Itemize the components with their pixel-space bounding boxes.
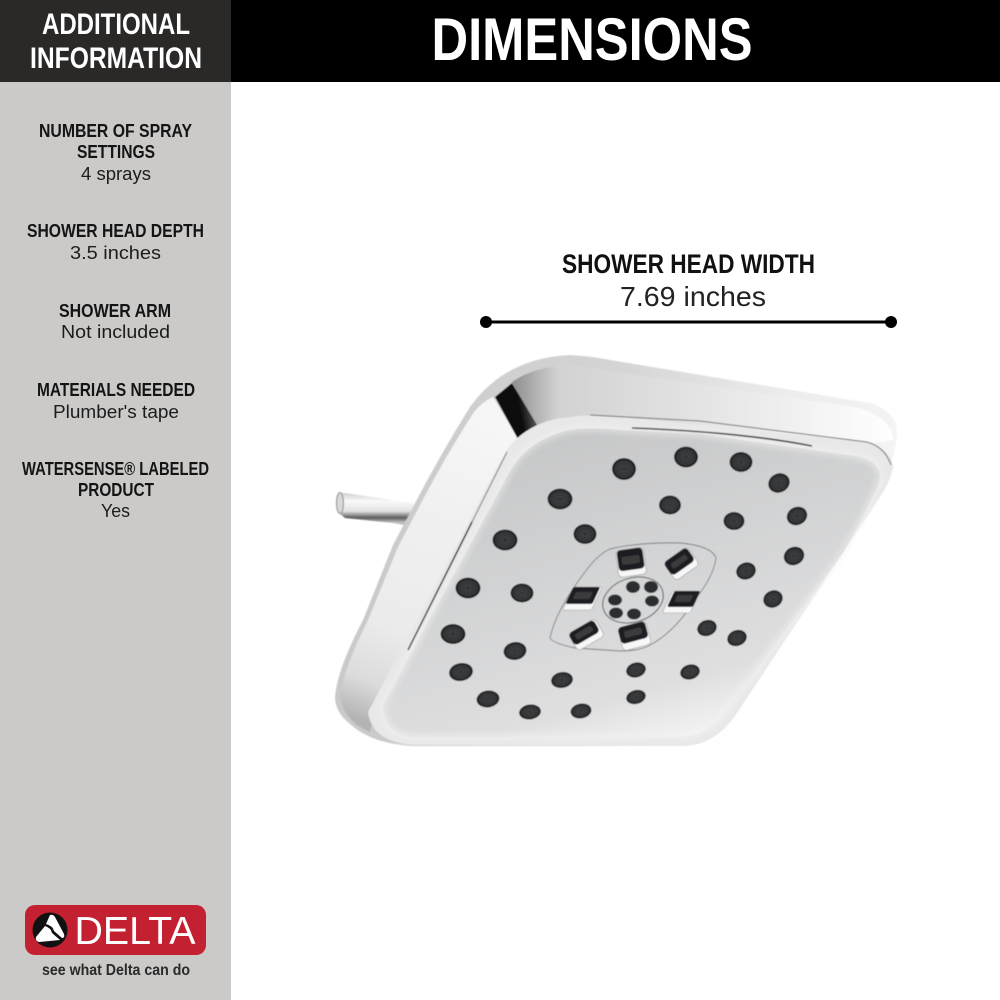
logo: delta: DELTA — [74, 910, 196, 953]
text block: watersense labeled product: WATERSENSE® LABELED — [22, 458, 209, 479]
spray face — [383, 428, 880, 737]
jet right — [662, 591, 700, 613]
text block: watersense labeled product — [22, 458, 209, 521]
text block: watersense labeled product: PRODUCT — [78, 479, 155, 500]
chrome reflection streak — [495, 383, 537, 441]
text block: materials needed: Plumber's tape — [53, 401, 179, 422]
inner nozzle ring — [597, 569, 669, 631]
text block: shower arm — [59, 300, 171, 342]
shower arm stub — [336, 492, 414, 526]
text block: number of spray settings — [39, 120, 193, 184]
heading: additional information: INFORMATION — [30, 42, 202, 75]
outer spray nozzles — [441, 447, 810, 720]
jet bottom-left — [568, 618, 605, 651]
jet bottom-right — [617, 621, 652, 651]
text block: number of spray settings: NUMBER OF SPRAY — [39, 120, 193, 141]
logo: delta: see what Delta can do — [42, 962, 190, 979]
jet top-right — [663, 546, 700, 581]
heading: additional information: ADDITIONAL — [42, 8, 190, 41]
front rim — [368, 415, 893, 746]
text block: watersense labeled product: Yes — [101, 500, 130, 521]
rectangular jets — [563, 546, 700, 651]
text block: shower head depth: SHOWER HEAD DEPTH — [27, 220, 204, 241]
text block: number of spray settings: SETTINGS — [77, 141, 155, 162]
heading: additional information — [30, 8, 202, 75]
dimension arrow: width line — [480, 316, 897, 328]
central spray plate outline — [550, 543, 716, 651]
text block: number of spray settings: 4 sprays — [81, 163, 151, 184]
text block: materials needed — [37, 379, 195, 422]
jet top-left — [615, 547, 647, 578]
text block: shower arm: SHOWER ARM — [59, 300, 171, 321]
panel: additional information sidebar — [0, 0, 231, 1000]
text block: shower head depth — [27, 220, 204, 263]
label: shower head width — [562, 249, 815, 312]
title: dimensions: DIMENSIONS — [432, 6, 752, 73]
header bar: additional information — [0, 0, 231, 82]
rim dark lines — [408, 415, 891, 650]
label: shower head width: SHOWER HEAD WIDTH — [562, 249, 815, 279]
housing left side panel — [340, 397, 522, 732]
text block: shower arm: Not included — [61, 321, 170, 342]
jet left — [563, 587, 602, 610]
housing top band — [512, 365, 893, 444]
text block: shower head depth: 3.5 inches — [70, 242, 161, 263]
text block: materials needed: MATERIALS NEEDED — [37, 379, 195, 400]
illustration: shower head — [335, 355, 897, 746]
logo: delta — [25, 905, 206, 979]
face edge glow — [383, 428, 880, 737]
housing outer edge — [335, 355, 897, 746]
label: shower head width: 7.69 inches — [620, 281, 766, 312]
header bar: dimensions — [231, 0, 1000, 82]
